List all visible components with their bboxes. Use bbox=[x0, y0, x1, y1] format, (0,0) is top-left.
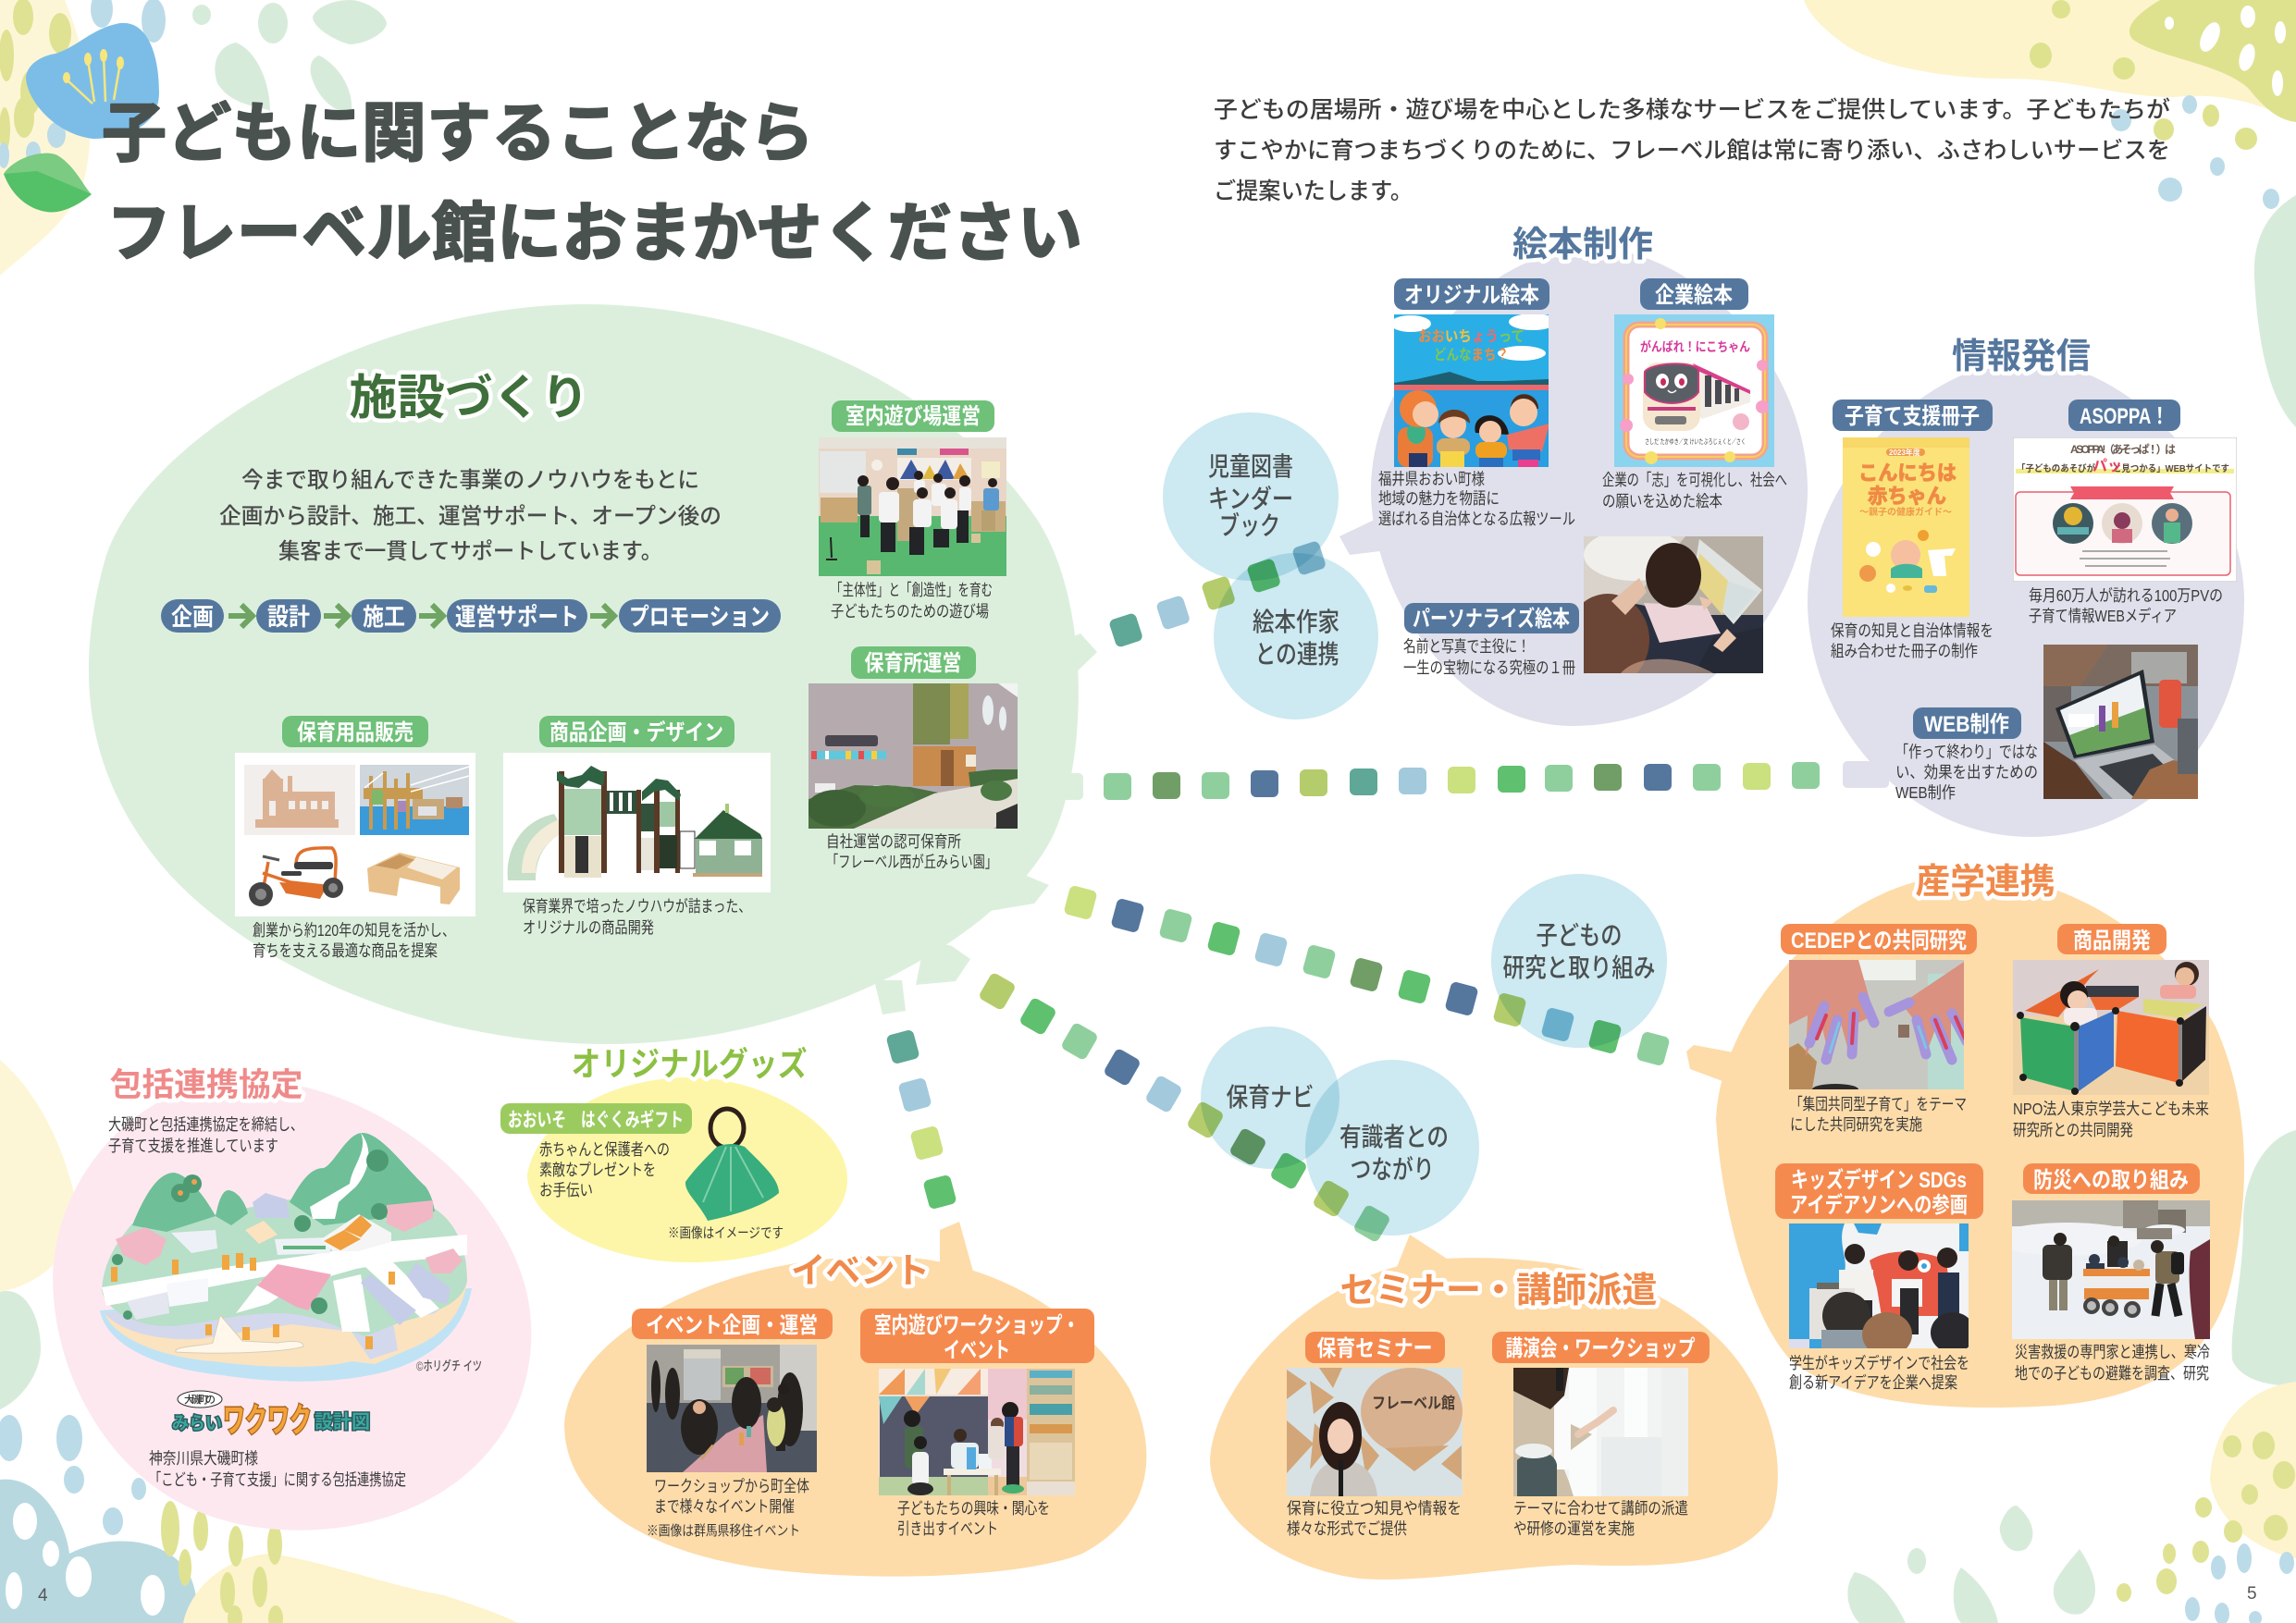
caption: lecture: テーマに合わせて講師の派遣 bbox=[1513, 1499, 1688, 1518]
bubble: children's books kinder book: ブック bbox=[1219, 511, 1280, 540]
bubble: expert connections: 有識者との bbox=[1339, 1123, 1449, 1151]
panel: seminars (セミナー・講師派遣) bbox=[1210, 1235, 1778, 1580]
intro text: すこやかに育つまちづくりのために、フレーベル館は常に寄り添い、ふさわしいサービスを bbox=[1214, 138, 2170, 164]
caption: gift: 素敵なプレゼントを bbox=[539, 1161, 656, 1179]
caption: personalized book bbox=[1403, 637, 1575, 677]
bubble: children's books kinder book: 児童図書 bbox=[1208, 452, 1293, 481]
caption: kids design: 創る新アイデアを企業へ提案 bbox=[1789, 1373, 1957, 1392]
process flow: 設計 bbox=[267, 603, 310, 631]
label: childcare seminar: 保育セミナー bbox=[1317, 1336, 1432, 1361]
caption: corporate book bbox=[1602, 471, 1787, 510]
label: personalized book: パーソナライズ絵本 bbox=[1413, 606, 1570, 632]
caption: CEDEP bbox=[1790, 1095, 1967, 1134]
description bbox=[219, 468, 722, 564]
photo: event bbox=[647, 1345, 817, 1472]
caption: indoor playground: 「主体性」と「創造性」を育む bbox=[831, 581, 993, 599]
photo: kids design presentation bbox=[1789, 1223, 1969, 1348]
caption: disaster prevention: 災害救援の専門家と連携し、寒冷 bbox=[2015, 1343, 2210, 1361]
logo: wakuwaku plan bbox=[172, 1391, 370, 1439]
caption: product development: 研究所との共同開発 bbox=[2013, 1121, 2133, 1139]
yellow blob bbox=[527, 1077, 847, 1262]
caption: kids design: 学生がキッズデザインで社会を bbox=[1789, 1354, 1969, 1372]
icon: blue flower bbox=[26, 23, 159, 139]
decor: left-edge background shapes bbox=[0, 1060, 518, 1623]
logo: wakuwaku plan: 大磯町の bbox=[184, 1393, 216, 1406]
logo: wakuwaku plan: 設計図 bbox=[315, 1411, 370, 1432]
caption: personalized book: 名前と写真で主役に！ bbox=[1403, 637, 1530, 656]
caption: disaster prevention: 地での子どもの避難を調査、研究 bbox=[2015, 1364, 2209, 1383]
label: product development: 商品開発 bbox=[2073, 928, 2151, 953]
caption: town book: 選ばれる自治体となる広報ツール bbox=[1378, 510, 1575, 528]
heading: セミナー・講師派遣 bbox=[1339, 1272, 1658, 1310]
photo: product blocks bbox=[2013, 960, 2209, 1095]
ASOPPA website screenshot: ASOPPA!（あそっぱ！）は bbox=[2070, 443, 2176, 456]
photo: lecture bbox=[1513, 1368, 1688, 1496]
bubble: picture book authors: 絵本作家 bbox=[1253, 608, 1339, 636]
ASOPPA website screenshot: 「子どものあそびが と見つかる」WEBサイトです bbox=[2017, 462, 2229, 474]
label: ASOPPA bbox=[2068, 400, 2180, 431]
caption: CEDEP: にした共同研究を実施 bbox=[1790, 1115, 1922, 1134]
photo: child reading bbox=[1584, 536, 1763, 673]
heading: 絵本制作 bbox=[1512, 226, 1653, 264]
lavender blob bbox=[1808, 361, 2244, 837]
caption: childcare goods: 創業から約120年の知見を活かし、 bbox=[253, 921, 455, 940]
caption: product planning: オリジナルの商品開発 bbox=[523, 918, 654, 937]
heading: 包括連携協定 bbox=[109, 1067, 303, 1103]
caption: personalized book: 一生の宝物になる究極の１冊 bbox=[1403, 658, 1575, 677]
bubble: picture book authors: との連携 bbox=[1254, 640, 1339, 669]
panel: picture books (絵本制作) bbox=[1339, 226, 1808, 726]
panel: comprehensive agreement (包括連携協定) bbox=[53, 1067, 531, 1531]
process flow: プロモーション bbox=[629, 603, 770, 631]
book cover: town book: どんなまち？ bbox=[1434, 347, 1509, 363]
bubble: children research bbox=[1491, 874, 1667, 1048]
bubble: children's books kinder book: キンダー bbox=[1208, 485, 1293, 513]
caption: gift bbox=[539, 1140, 784, 1241]
label: childcare goods: 保育用品販売 bbox=[297, 720, 414, 745]
icon: gift bag bbox=[685, 1109, 779, 1221]
label: indoor play workshop bbox=[860, 1309, 1094, 1363]
description: 企画から設計、施工、運営サポート、オープン後の bbox=[219, 504, 722, 529]
label: personalized book bbox=[1404, 603, 1579, 633]
caption: town book: 福井県おおい町様 bbox=[1378, 470, 1485, 488]
label: lectures and workshops: 講演会・ワークショップ bbox=[1506, 1336, 1695, 1361]
credit: ©ホリグチ イツ bbox=[416, 1359, 482, 1373]
icon: green leaf bbox=[4, 154, 92, 213]
booklet cover: 2023年度 bbox=[1889, 448, 1920, 457]
lavender blob bbox=[1339, 248, 1808, 726]
caption: booklet: 組み合わせた冊子の制作 bbox=[1831, 642, 1978, 660]
caption: web production bbox=[1895, 743, 2038, 802]
caption: product planning: 保育業界で培ったノウハウが詰まった、 bbox=[523, 897, 751, 916]
caption: lecture: や研修の運営を実施 bbox=[1513, 1519, 1635, 1538]
booklet cover: 〜親子の健康ガイド〜 bbox=[1859, 506, 1952, 518]
caption: childcare goods bbox=[253, 921, 455, 960]
label: parenting booklet: 子育て支援冊子 bbox=[1845, 404, 1980, 429]
illustration: town map bbox=[100, 1133, 482, 1382]
description: 大磯町と包括連携協定を締結し、 bbox=[108, 1115, 303, 1134]
description: 今まで取り組んできた事業のノウハウをもとに bbox=[241, 468, 699, 493]
page number 4: 4 bbox=[38, 1586, 48, 1605]
caption: ASOPPA: 子育て情報WEBメディア bbox=[2029, 607, 2177, 625]
bubble: children's books kinder book bbox=[1163, 412, 1339, 581]
description bbox=[108, 1115, 303, 1155]
book cover: train book bbox=[1614, 314, 1774, 467]
booklet cover: 赤ちゃん bbox=[1868, 485, 1946, 508]
decor: top-right background shapes bbox=[1804, 0, 2296, 427]
label: original picture book: オリジナル絵本 bbox=[1404, 283, 1539, 308]
page number 5: 5 bbox=[2247, 1584, 2257, 1604]
caption: indoor playground: 子どもたちのための遊び場 bbox=[831, 602, 989, 621]
decor: bottom-right background shapes bbox=[1847, 1130, 2296, 1623]
caption: workshop bbox=[897, 1499, 1050, 1538]
description: 集客まで一貫してサポートしています。 bbox=[278, 539, 662, 564]
panel: facility building (施設づくり) bbox=[89, 304, 1097, 1044]
booklet cover: こんにちは bbox=[1858, 461, 1957, 485]
connector: squares to picture books bbox=[1108, 540, 1327, 648]
photo: indoor playground bbox=[819, 437, 1006, 576]
connector: squares to information bbox=[1104, 762, 1820, 800]
orange blob bbox=[1210, 1235, 1778, 1580]
book cover: town book bbox=[1394, 314, 1549, 467]
caption: ASOPPA: 毎月60万人が訪れる100万PVの bbox=[2029, 586, 2223, 605]
book cover: train book: がんばれ！にこちゃん bbox=[1640, 339, 1750, 354]
photo: childcare goods bbox=[235, 753, 475, 916]
caption: nursery: 自社運営の認可保育所 bbox=[826, 832, 961, 851]
panel: industry-academia collaboration (産学連携) bbox=[1686, 863, 2244, 1408]
pink blob bbox=[53, 1079, 531, 1531]
label: product development bbox=[2057, 924, 2166, 954]
process flow bbox=[161, 599, 781, 633]
photo: laptop bbox=[2043, 645, 2198, 799]
caption: web production: WEB制作 bbox=[1895, 783, 1956, 802]
label: product planning: 商品企画・デザイン bbox=[549, 719, 723, 745]
caption: web production: 「作って終わり」ではな bbox=[1895, 743, 2038, 761]
label: Kids Design bbox=[1775, 1163, 1983, 1219]
label: web production: WEB制作 bbox=[1924, 712, 2009, 737]
label: corporate picture book: 企業絵本 bbox=[1655, 283, 1733, 308]
caption: nursery bbox=[826, 832, 997, 871]
booklet cover bbox=[1843, 437, 1969, 617]
bubble: childcare navi: 保育ナビ bbox=[1227, 1083, 1314, 1112]
caption: gift: お手伝い bbox=[539, 1181, 593, 1199]
label: ASOPPA: ASOPPA！ bbox=[2080, 404, 2168, 429]
caption: event bbox=[647, 1477, 809, 1539]
label: nursery: 保育所運営 bbox=[864, 651, 962, 676]
label: lectures and workshops bbox=[1492, 1332, 1710, 1363]
label: indoor playground: 室内遊び場運営 bbox=[846, 404, 981, 429]
caption: seminar: 保育に役立つ知見や情報を bbox=[1287, 1499, 1462, 1518]
caption: agreement: 神奈川県大磯町様 bbox=[149, 1449, 258, 1468]
heading: イベント bbox=[791, 1252, 930, 1291]
label: disaster prevention: 防災への取り組み bbox=[2033, 1168, 2189, 1193]
caption: gift: 赤ちゃんと保護者への bbox=[539, 1140, 670, 1159]
title: フレーベル館におまかせください bbox=[106, 197, 1082, 269]
logo: wakuwaku plan: ワクワク bbox=[223, 1401, 312, 1439]
orange blob bbox=[564, 1222, 1146, 1577]
bubble: picture book authors bbox=[1214, 553, 1378, 719]
connector: squares to events bbox=[885, 1029, 957, 1210]
photo: snow evacuation bbox=[2012, 1200, 2210, 1339]
caption: indoor playground bbox=[831, 581, 993, 621]
label: indoor play workshop: イベント bbox=[944, 1338, 1010, 1363]
intro text: ご提案いたします。 bbox=[1214, 178, 1413, 204]
panel: original goods (オリジナルグッズ) bbox=[500, 1045, 847, 1262]
label: nursery bbox=[851, 646, 976, 679]
green blob with spikes bbox=[89, 304, 1097, 1044]
photo: workshop bbox=[879, 1369, 1075, 1495]
caption: corporate book: の願いを込めた絵本 bbox=[1602, 492, 1722, 510]
caption: workshop: 子どもたちの興味・関心を bbox=[897, 1499, 1050, 1518]
caption: event: まで様々なイベント開催 bbox=[654, 1497, 795, 1516]
caption: event: ※画像は群馬県移住イベント bbox=[647, 1523, 800, 1539]
caption: CEDEP: 「集団共同型子育て」をテーマ bbox=[1790, 1095, 1967, 1113]
decor: top-left background shapes bbox=[0, 0, 387, 276]
label: corporate picture book bbox=[1640, 278, 1748, 310]
intro text: 子どもの居場所・遊び場を中心とした多様なサービスをご提供しています。子どもたちが bbox=[1214, 97, 2170, 123]
caption: nursery: 「フレーベル西が丘みらい園」 bbox=[826, 853, 997, 871]
caption: ASOPPA bbox=[2029, 586, 2223, 625]
panel: information (情報発信) bbox=[1808, 338, 2244, 837]
caption: agreement bbox=[149, 1449, 406, 1489]
bubble: children research: 子どもの bbox=[1536, 921, 1623, 950]
caption: town book bbox=[1378, 470, 1575, 528]
photo: seminar speaker bbox=[1287, 1368, 1463, 1496]
label: gift bbox=[500, 1103, 692, 1134]
description: 子育て支援を推進しています bbox=[108, 1137, 278, 1155]
bubble: children research: 研究と取り組み bbox=[1502, 953, 1656, 982]
logo: wakuwaku plan: みらい bbox=[172, 1414, 222, 1433]
label: Kids Design: アイデアソンへの参画 bbox=[1790, 1192, 1968, 1218]
caption: product development bbox=[2013, 1100, 2209, 1139]
process flow: 運営サポート bbox=[455, 603, 579, 631]
orange blob bbox=[1686, 874, 2244, 1408]
caption: agreement: 「こども・子育て支援」に関する包括連携協定 bbox=[149, 1470, 406, 1489]
caption: web production: い、効果を出すための bbox=[1895, 763, 2038, 781]
heading: 産学連携 bbox=[1915, 863, 2055, 902]
label: indoor play workshop: 室内遊びワークショップ・ bbox=[874, 1313, 1080, 1338]
caption: seminar: 様々な形式でご提供 bbox=[1287, 1519, 1407, 1538]
caption: product development: NPO法人東京学芸大こども未来 bbox=[2013, 1100, 2209, 1118]
heading: 施設づくり bbox=[350, 372, 588, 425]
caption: workshop: 引き出すイベント bbox=[897, 1519, 998, 1538]
title bbox=[102, 97, 1082, 269]
caption: childcare goods: 育ちを支える最適な商品を提案 bbox=[253, 941, 438, 960]
process flow: 企画 bbox=[171, 603, 214, 631]
heading: オリジナルグッズ bbox=[572, 1045, 807, 1083]
heading: 情報発信 bbox=[1952, 338, 2091, 376]
caption: lecture bbox=[1513, 1499, 1688, 1538]
caption: town book: 地域の魅力を物語に bbox=[1378, 489, 1500, 508]
caption: event: ワークショップから町全体 bbox=[654, 1477, 809, 1495]
ASOPPA website screenshot: パッ bbox=[2092, 458, 2122, 474]
bubble: childcare navi bbox=[1201, 1027, 1339, 1169]
connector: squares to seminars bbox=[978, 972, 1391, 1243]
caption: booklet: 保育の知見と自治体情報を bbox=[1831, 621, 1994, 640]
caption: booklet bbox=[1831, 621, 1994, 660]
panel: events (イベント) bbox=[564, 1222, 1146, 1577]
photo: nursery building bbox=[809, 683, 1018, 829]
bubble: expert connections: つながり bbox=[1351, 1155, 1434, 1184]
label: event planning: イベント企画・運営 bbox=[646, 1313, 818, 1338]
bubble: expert connections bbox=[1305, 1060, 1479, 1236]
caption: corporate book: 企業の「志」を可視化し、社会へ bbox=[1602, 471, 1787, 489]
label: Kids Design: キッズデザイン SDGs bbox=[1791, 1167, 1967, 1193]
ASOPPA website screenshot bbox=[2013, 437, 2237, 582]
process flow: 施工 bbox=[363, 603, 405, 631]
caption: gift: ※画像はイメージです bbox=[668, 1225, 784, 1241]
caption: disaster prevention bbox=[2015, 1343, 2210, 1383]
book cover: town book: おおいちょうって bbox=[1418, 328, 1524, 345]
connector: squares to industry collaboration bbox=[1063, 885, 1671, 1066]
caption: kids design bbox=[1789, 1354, 1969, 1392]
label: CEDEP: CEDEPとの共同研究 bbox=[1791, 928, 1967, 953]
label: gift: おおいそ はぐくみギフト bbox=[508, 1110, 684, 1131]
caption: product planning bbox=[523, 897, 751, 937]
photo: painted hands bbox=[1789, 960, 1964, 1089]
intro text bbox=[1214, 97, 2170, 204]
title: 子どもに関することなら bbox=[102, 97, 814, 169]
caption: seminar bbox=[1287, 1499, 1462, 1538]
photo: playground equipment bbox=[503, 753, 771, 892]
